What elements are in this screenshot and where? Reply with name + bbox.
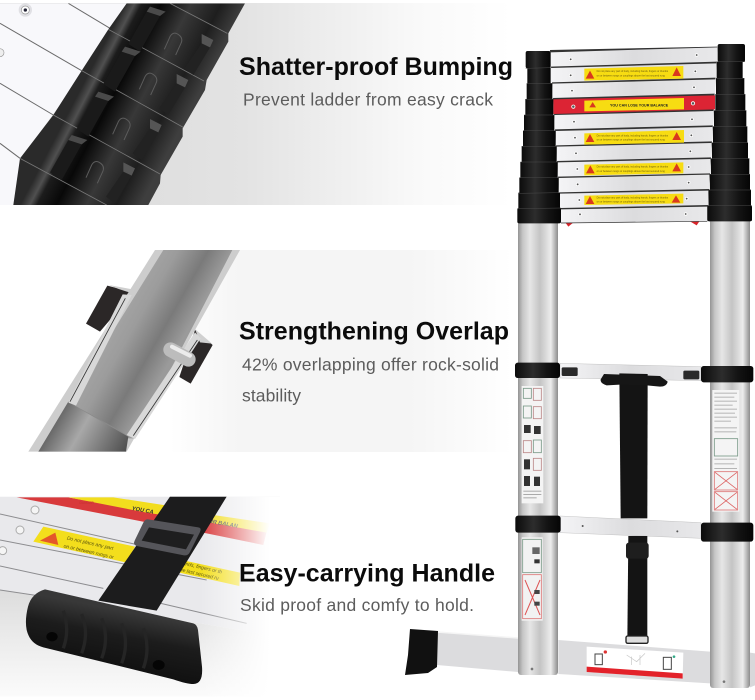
rung 5 [554,111,713,129]
right black locking block [179,329,213,384]
white rung faces [0,3,133,205]
icon: partial rivet [0,49,4,57]
red tabs under folded section [565,221,699,227]
warning sticker 1 [584,66,683,81]
sticker text right: ands, fingers or th [182,561,223,576]
warning sticker 1: on or between rungs or couplings above the last secured rung [597,74,665,77]
collar seams [517,62,752,209]
ladder: right tube [710,215,750,688]
warning sticker 3: Do not place any part of body, including hands, fingers or thumbs [597,134,669,137]
lower strap [626,536,649,643]
panel: strengthening overlap background [170,250,512,452]
text: skid proof: Skid proof and comfy to hold. [240,595,474,615]
rung 4 red [553,95,715,114]
warning sticker 4: Do not place any part of body, including hands, fingers or thumbs [597,166,669,169]
right sleeve dark line [133,340,197,436]
left sleeve dark line [70,298,125,402]
text: prevent ladder from easy crack: Prevent ladder from easy crack [243,90,493,110]
heading: Easy-carrying Handle: Easy-carrying Handle [239,560,495,588]
black foot cap [405,629,438,675]
ladder lower section [515,363,755,687]
red rung sticker [68,497,270,533]
ladder top folded section [517,44,752,227]
bar stub right [750,653,755,687]
left tube lower safety sticker [522,537,543,621]
rung 9 [559,175,709,192]
red rung sticker: DANGER [79,501,94,505]
collars middle left [515,363,560,378]
warning sticker 4: on or between rungs or couplings above the last secured rung [597,170,665,173]
rung clip right [683,371,699,379]
text: stability: stability [242,386,301,406]
left black locking block [86,285,133,332]
warning sticker balance: YOU CAN LOSE YOUR BALANCE [610,103,669,107]
rivets [0,506,39,555]
right sleeve wall [127,332,201,439]
ladder: left tube [518,215,558,675]
tube foot rivets [531,668,725,683]
rung with handle [560,363,701,381]
lower rung [560,516,701,538]
sticker text right second line: the last secured ru [178,567,219,582]
rung 11 [561,207,707,223]
overlap end face [70,403,128,437]
rung 1 [550,47,717,67]
yellow warning sticker right [180,561,240,586]
ladder foot: left extension [405,629,518,675]
bottom cross bar [558,640,710,683]
upper strap [619,373,648,518]
handle hole right [153,660,165,670]
heading: Strengthening Overlap: Strengthening Overlap [239,318,509,346]
inner bore lower [38,402,128,452]
inner bore upper [68,250,232,438]
rung clip left [562,367,578,376]
handle hole left [46,632,58,641]
text: 42% overlapping: 42% overlapping offer rock-solid [242,354,499,374]
warning sticker 3: on or between rungs or couplings above the last secured rung [597,139,665,142]
ridges and U marks: third [77,92,162,140]
warning sticker 3 [584,130,684,145]
rung 7 [557,143,711,161]
warning sticker 4 [584,162,683,175]
rung 3 [552,79,715,98]
ridges and U marks: second [104,46,188,95]
warning sticker 5: Do not place any part of body, including hands, fingers or thumbs [597,196,669,199]
photo: tube cross-section with overlap [28,250,240,452]
right tube safety sticker [712,390,739,512]
silver rung faces [0,496,244,630]
icon: rivet [19,3,32,17]
sticker text left: Do not place any part [66,535,114,552]
warning sticker 5: on or between rungs or couplings above the last secured rung [597,201,665,204]
ridges and U marks: top [128,7,213,75]
photo: black rung end caps close-up [0,3,245,205]
outer tube wall [28,250,240,452]
top handle on rung [601,374,668,387]
lower beam area [0,590,244,682]
rubber handle grip [26,589,202,684]
fade to white on the right [202,497,280,682]
rung rivets [569,54,698,216]
warning sticker balance [584,98,684,111]
rung 6 [556,127,712,145]
black stepped band [13,3,245,205]
black carrying strap [98,497,227,611]
sticker text left second line: on or between rungs or [63,543,115,561]
collars middle right [701,366,753,382]
rung 2 [551,63,716,82]
strap buckle [134,519,201,555]
right black collars [707,44,752,221]
heading: Shatter-proof Bumping: Shatter-proof Bumping [239,53,513,81]
collars lower right [701,523,753,542]
panel: shatter-proof bumping background [0,3,512,205]
icon: warning triangle [40,533,58,545]
bottom instruction label [587,647,683,679]
locking pin [171,347,190,359]
yellow warning sticker left [33,527,135,563]
red rung sticker: YOU CA [131,506,154,516]
left sleeve wall [68,294,132,406]
red rung sticker: UR BALAN [208,519,239,530]
left tube upper safety sticker [522,386,543,503]
collars lower left [515,516,561,533]
rung 10 [560,191,708,208]
collar seams [20,3,227,205]
warning sticker 5 [584,194,683,205]
ridges and U marks: fourth [50,135,135,203]
rung seams [0,3,110,158]
rung seam lines [0,514,247,623]
left black collars [517,51,561,223]
warning sticker 1: Do not place any part of body, including hands, fingers or thumbs [597,70,669,73]
dark backing [550,47,717,223]
red rung [17,497,267,545]
rung 8 [558,159,710,177]
photo: handle and strap close-up [0,496,268,684]
